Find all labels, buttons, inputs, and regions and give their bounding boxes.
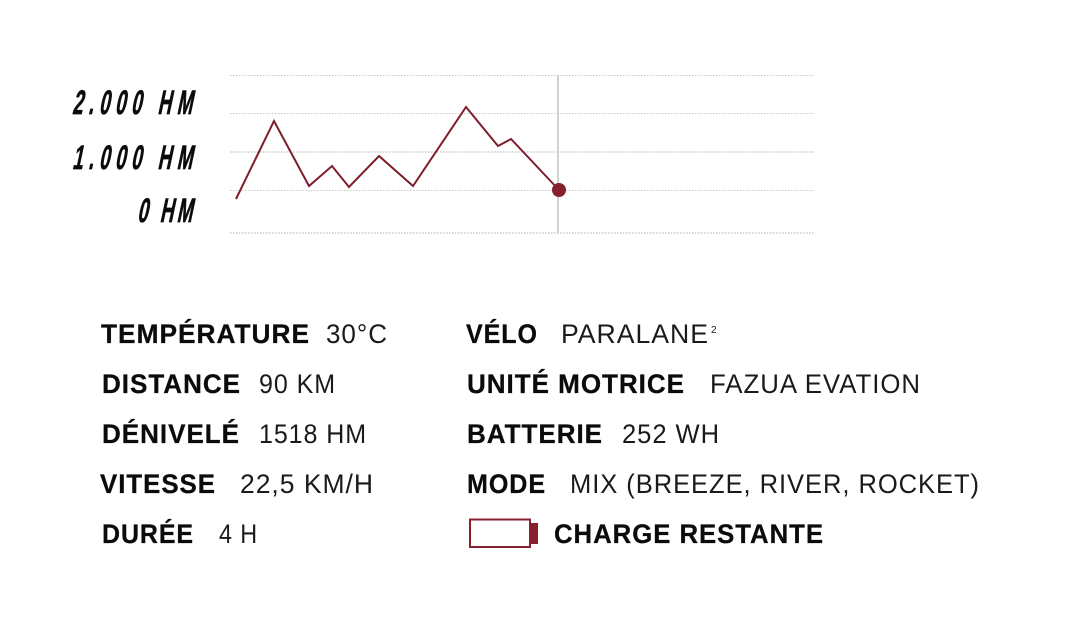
batterie: 252 WH <box>622 419 720 449</box>
mode: MODE <box>467 469 546 499</box>
vitesse: 22,5 KM/H <box>240 469 374 499</box>
axis label: 1.000 HM: 1.000 HM <box>70 139 198 176</box>
unité motrice: UNITÉ MOTRICE <box>467 368 685 399</box>
current position dot <box>552 183 566 197</box>
axis label: 0 HM: 0 HM <box>135 192 198 229</box>
dénivelé: DÉNIVELÉ <box>102 418 240 449</box>
elevation chart <box>230 75 815 233</box>
durée: DURÉE <box>102 518 194 549</box>
vélo: PARALANE <box>561 319 709 349</box>
température: 30°C <box>326 319 388 349</box>
distance <box>102 369 336 399</box>
distance: DISTANCE <box>102 369 241 399</box>
ride stats column <box>100 318 388 549</box>
unité motrice: FAZUA EVATION <box>710 369 921 399</box>
température: TEMPÉRATURE <box>101 318 310 349</box>
bike stats column <box>466 318 980 549</box>
current position marker line <box>557 75 559 233</box>
vitesse <box>100 469 374 499</box>
durée: 4 H <box>219 519 258 549</box>
vélo <box>466 318 717 349</box>
unité motrice <box>467 368 921 399</box>
vélo: VÉLO <box>466 318 538 349</box>
distance: 90 KM <box>259 369 336 399</box>
icon: battery <box>470 520 538 547</box>
dénivelé: 1518 HM <box>259 419 367 449</box>
vélo: 2 <box>711 325 717 336</box>
durée <box>102 518 258 549</box>
batterie: BATTERIE <box>467 419 603 449</box>
vitesse: VITESSE <box>100 469 216 499</box>
axis label: 2.000 HM: 2.000 HM <box>70 84 198 121</box>
dénivelé <box>102 418 367 449</box>
mode: MIX (BREEZE, RIVER, ROCKET) <box>570 469 980 499</box>
charge restante: CHARGE RESTANTE <box>554 519 824 549</box>
batterie <box>467 419 720 449</box>
elevation profile line <box>236 107 559 199</box>
